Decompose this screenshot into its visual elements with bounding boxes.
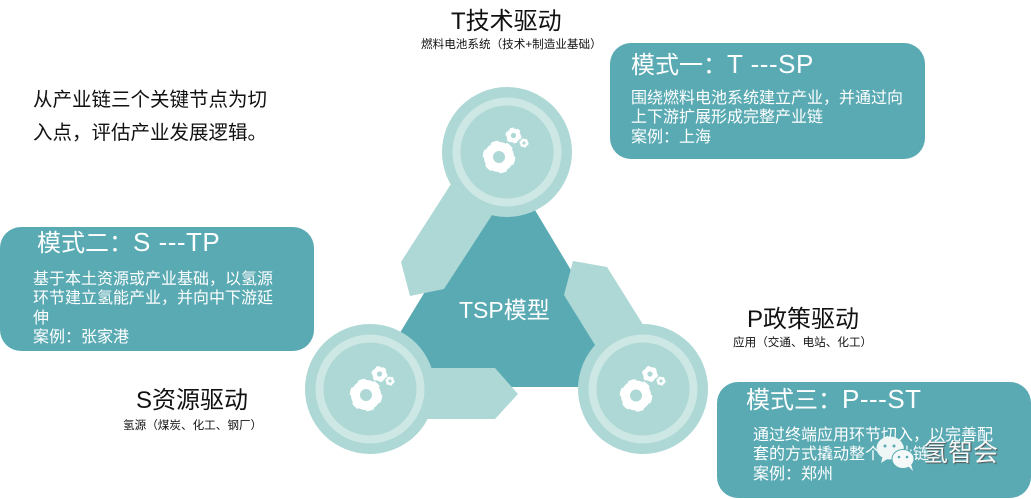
heading: P driver xyxy=(733,306,872,349)
mode two body: 伸 xyxy=(33,310,49,327)
mode one body: 案例：上海 xyxy=(631,129,711,146)
panel: mode three xyxy=(717,382,1031,498)
icon: left gears xyxy=(352,367,394,410)
center label: TSP模型 xyxy=(459,297,550,323)
mode two body xyxy=(33,270,273,346)
icon: right gears xyxy=(622,367,665,410)
right arm xyxy=(564,261,650,345)
heading: P driver: P政策驱动 xyxy=(747,306,859,333)
heading: S driver: S资源驱动 xyxy=(136,387,248,414)
panel: mode one xyxy=(610,43,925,159)
top gear circle xyxy=(442,87,572,217)
mode three body: 案例：郑州 xyxy=(753,466,833,483)
icon: top gears xyxy=(484,128,528,172)
heading: T driver: 燃料电池系统（技术+制造业基础） xyxy=(421,38,602,51)
mode two body: 环节建立氢能产业，并向中下游延 xyxy=(33,290,273,307)
mode three title: 模式三：P---ST xyxy=(746,384,922,414)
mode three body: 套的方式撬动整个产业链 xyxy=(753,446,929,463)
icon: chat bubbles xyxy=(876,436,914,471)
mode three body: 通过终端应用环节切入，以完善配 xyxy=(753,427,993,444)
right gear circle xyxy=(578,324,708,454)
mode one body: 上下游扩展形成完整产业链 xyxy=(631,109,823,126)
central triangle xyxy=(367,160,641,387)
heading: S driver: 氢源（煤炭、化工、钢厂） xyxy=(123,419,262,432)
intro text xyxy=(33,89,267,144)
mode three body xyxy=(753,426,993,483)
mode two body: 基于本土资源或产业基础，以氢源 xyxy=(33,271,273,288)
top arm xyxy=(401,184,520,296)
left gear circle xyxy=(305,324,435,454)
heading: T driver: T技术驱动 xyxy=(451,8,562,35)
panel: mode two xyxy=(0,227,314,351)
mode one title: 模式一：T ---SP xyxy=(631,49,814,79)
mode two title: 模式二：S ---TP xyxy=(37,227,220,257)
intro text: 入点，评估产业发展逻辑。 xyxy=(33,122,267,144)
mode one body: 围绕燃料电池系统建立产业，并通过向 xyxy=(631,90,903,107)
heading: P driver: 应用（交通、电站、化工） xyxy=(733,336,872,349)
heading: T driver xyxy=(421,8,602,51)
mode one body xyxy=(631,89,903,146)
watermark xyxy=(876,436,998,471)
heading: S driver xyxy=(123,387,262,432)
mode two body: 案例：张家港 xyxy=(33,329,129,346)
left arm xyxy=(420,368,518,419)
intro text: 从产业链三个关键节点为切 xyxy=(33,89,267,111)
watermark text: 氢智会 xyxy=(923,439,998,467)
